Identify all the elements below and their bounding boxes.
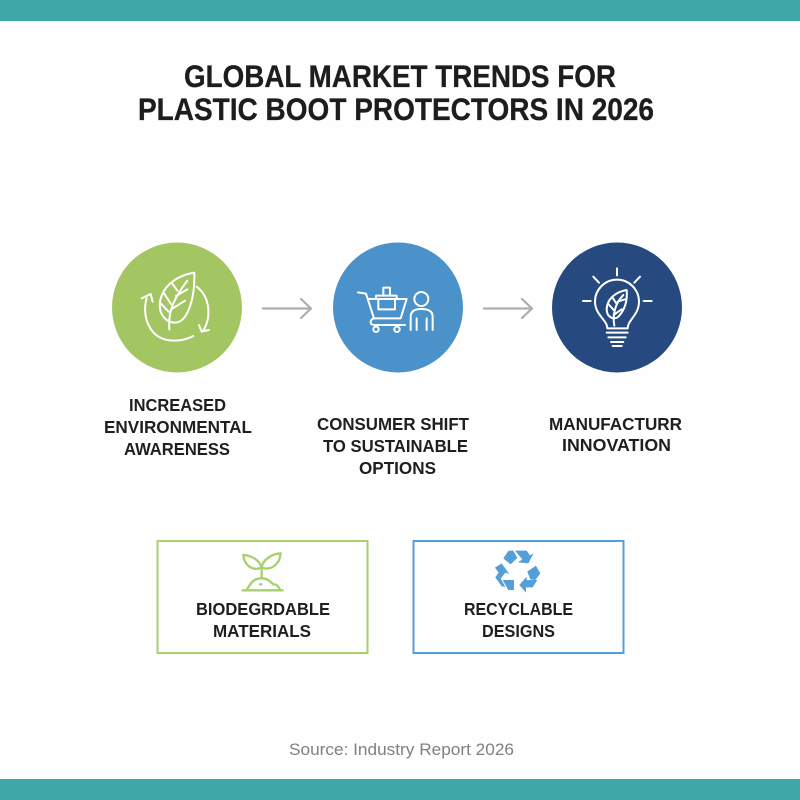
arrow 2 — [484, 299, 532, 318]
label: CONSUMER SHIFT — [317, 414, 469, 434]
blue border — [414, 541, 624, 653]
label — [104, 395, 252, 459]
label: MATERIALS — [213, 621, 311, 641]
icon: shopping cart and person — [358, 288, 433, 332]
label: OPTIONS — [359, 458, 436, 478]
label: MANUFACTURR — [549, 414, 682, 434]
icon: recycling symbol — [495, 551, 540, 593]
source note: Source: Industry Report 2026 — [289, 740, 514, 759]
blue circle — [333, 242, 463, 372]
step 2: consumer shift — [317, 242, 469, 478]
icon: leaf with recycling arrows — [142, 273, 209, 341]
label: DESIGNS — [482, 621, 555, 641]
label: BIODEGRDABLE — [196, 599, 330, 619]
label: TO SUSTAINABLE — [323, 436, 468, 456]
label: AWARENESS — [124, 439, 230, 459]
label — [549, 414, 682, 455]
arrow 1 — [263, 299, 311, 318]
green circle — [112, 242, 242, 372]
navy circle — [552, 242, 682, 372]
panel: biodegradable materials — [158, 541, 368, 653]
title: GLOBAL MARKET TRENDS FOR — [184, 58, 616, 94]
title: PLASTIC BOOT PROTECTORS IN 2026 — [138, 91, 654, 127]
panel: recyclable designs — [414, 541, 624, 653]
green border — [158, 541, 368, 653]
title — [138, 58, 654, 127]
step 1: increased environmental awareness — [104, 242, 252, 459]
label: INCREASED — [129, 395, 226, 415]
label: ENVIRONMENTAL — [104, 417, 252, 437]
label — [196, 599, 330, 641]
icon: sprout — [243, 553, 283, 590]
bottom teal band — [0, 779, 800, 800]
label: INNOVATION — [562, 435, 671, 455]
step 3: manufacturer innovation — [549, 242, 682, 455]
label: RECYCLABLE — [464, 599, 573, 619]
label — [464, 599, 573, 641]
top teal band — [0, 0, 800, 21]
label — [317, 414, 469, 478]
icon: light bulb with leaf — [583, 268, 652, 346]
